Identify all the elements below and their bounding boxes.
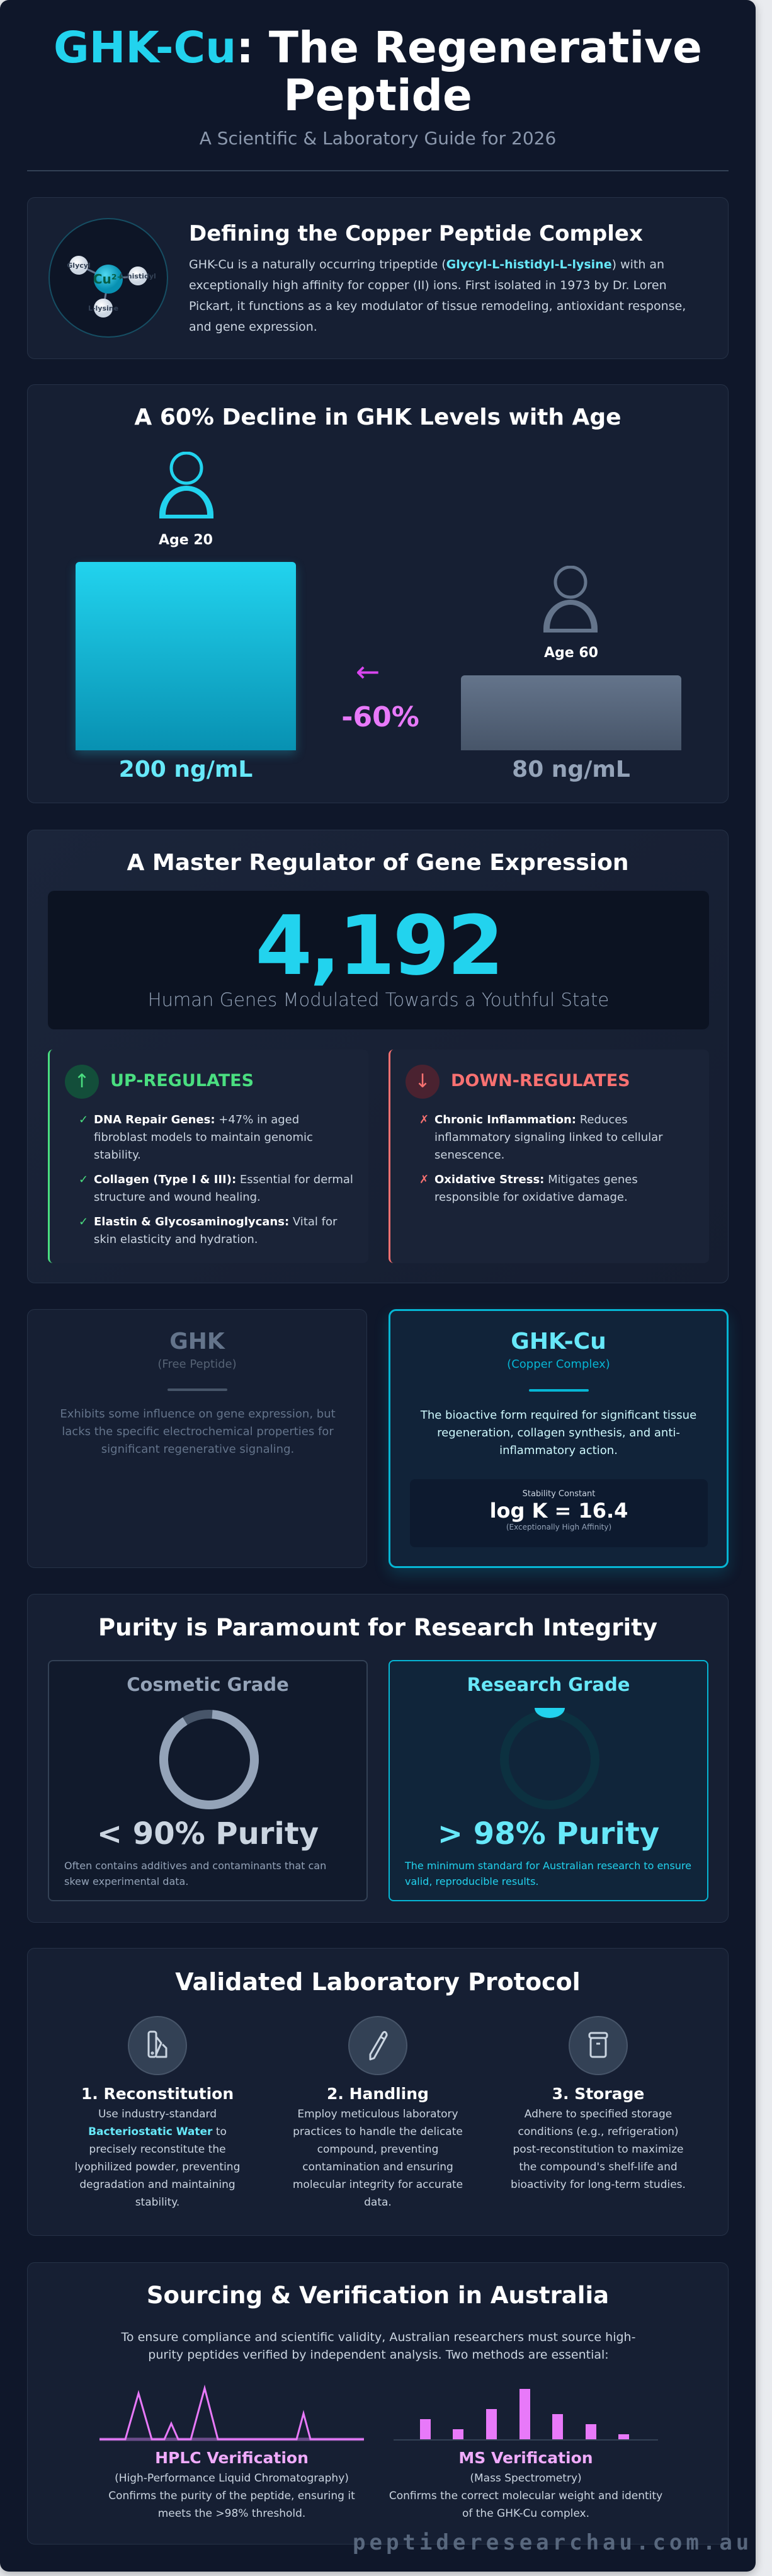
panel: down-regulates: DOWN-REGULATES bbox=[451, 1071, 630, 1091]
card: GHK free peptide: (Free Peptide) bbox=[157, 1358, 237, 1371]
icon: molecule: L-lysine bbox=[88, 304, 118, 312]
list: up-regulated genes bbox=[79, 1113, 353, 1246]
panel: master regulator bbox=[27, 830, 729, 1283]
HPLC label: HPLC Verification bbox=[155, 2449, 309, 2467]
HPLC label bbox=[108, 2449, 355, 2520]
card: research grade bbox=[389, 1660, 708, 1901]
panel: purity bbox=[27, 1594, 729, 1923]
card: cosmetic grade bbox=[48, 1660, 368, 1901]
heading: Purity is Paramount for Research Integrity bbox=[98, 1614, 657, 1641]
list: down-regulated: Chronic Inflammation: Reduces inflammatory signaling linked to cellular senescence. bbox=[434, 1113, 663, 1162]
card: GHK-Cu copper complex: (Copper Complex) bbox=[507, 1358, 610, 1371]
panel: up-regulates: UP-REGULATES bbox=[110, 1071, 254, 1091]
panel: defining the copper peptide complex bbox=[27, 197, 729, 359]
stat box: 4,192: Human Genes Modulated Towards a Youthful State bbox=[148, 989, 609, 1010]
heading: Validated Laboratory Protocol bbox=[175, 1968, 581, 1996]
MS label bbox=[389, 2449, 662, 2520]
stability constant box: Stability Constant bbox=[523, 1489, 595, 1499]
card: research grade: > 98% Purity bbox=[438, 1816, 659, 1852]
panel: 60% decline bbox=[27, 384, 729, 803]
subtitle: A Scientific & Laboratory Guide for 2026 bbox=[200, 128, 556, 149]
icon: down arrow bbox=[406, 1065, 440, 1099]
step 3: storage: Adhere to specified storage conditions (e.g., refrigeration) post-reconstitution to maximize the compound's shelf-life and bioactivity for long-term studies. bbox=[511, 2108, 686, 2191]
step 1: reconstitution: 1. Reconstitution bbox=[81, 2085, 234, 2103]
HPLC label: (High-Performance Liquid Chromatography) bbox=[115, 2472, 349, 2485]
heading: Defining the Copper Peptide Complex bbox=[189, 221, 643, 246]
heading: A 60% Decline in GHK Levels with Age bbox=[134, 404, 622, 430]
list: down-regulated: ✗ bbox=[419, 1173, 429, 1186]
HPLC label: Confirms the purity of the peptide, ensuring it meets the >98% threshold. bbox=[108, 2490, 355, 2520]
step 3: storage: 3. Storage bbox=[552, 2085, 644, 2103]
list: up-regulated genes: Collagen (Type I & III): Essential for dermal structure and wound healing. bbox=[94, 1173, 353, 1204]
panel: down-regulates bbox=[389, 1050, 709, 1263]
list: down-regulated: Oxidative Stress: Mitigates genes responsible for oxidative damage. bbox=[434, 1173, 638, 1204]
chart: MS bars bbox=[394, 2389, 658, 2441]
chart: HPLC bbox=[99, 2384, 364, 2441]
value: 80 ng/mL: 80 ng/mL bbox=[512, 757, 630, 782]
title bbox=[54, 23, 702, 121]
list: down-regulated bbox=[419, 1113, 663, 1204]
title: GHK-Cu: The Regenerative bbox=[54, 23, 702, 73]
bar: age 20 bbox=[76, 562, 296, 750]
stat box: 4,192 bbox=[48, 891, 709, 1029]
panel: up-regulates bbox=[48, 1050, 368, 1263]
-60%: -60% bbox=[341, 701, 419, 733]
list: up-regulated genes: DNA Repair Genes: +47% in aged fibroblast models to maintain genomic stability. bbox=[94, 1113, 313, 1162]
card: cosmetic grade: < 90% Purity bbox=[97, 1816, 319, 1852]
card: cosmetic grade: Often contains additives and contaminants that can skew experimental data. bbox=[64, 1860, 326, 1887]
icon: person age 60 bbox=[543, 566, 598, 633]
card: GHK-Cu copper complex: The bioactive form required for significant tissue regeneration, collagen synthesis, and anti-inflammatory action. bbox=[421, 1409, 696, 1457]
step 2: handling bbox=[293, 2016, 463, 2209]
list: up-regulated genes: Elastin & Glycosaminoglycans: Vital for skin elasticity and hydration. bbox=[94, 1215, 337, 1246]
icon: up arrow: ↑ bbox=[74, 1070, 90, 1092]
panel: protocol bbox=[27, 1948, 729, 2236]
icon: swatch bbox=[128, 2016, 187, 2075]
title: Peptide bbox=[283, 71, 472, 121]
label: age 20: Age 20 bbox=[159, 532, 213, 548]
icon: molecule: L-histidyl bbox=[120, 272, 156, 280]
list: up-regulated genes: ✓ bbox=[79, 1215, 88, 1228]
step 3: storage bbox=[511, 2016, 686, 2191]
icon: pencil bbox=[348, 2016, 407, 2075]
list: up-regulated genes: ✓ bbox=[79, 1173, 88, 1186]
icon: person age 20 bbox=[159, 452, 213, 518]
stability constant box: log K = 16.4 bbox=[490, 1499, 628, 1523]
ring chart: 90% bbox=[159, 1710, 259, 1809]
watermark: peptideresearchau.com.au bbox=[353, 2530, 752, 2555]
icon: molecule: Cu²⁺ bbox=[93, 272, 123, 287]
stability constant box: (Exceptionally High Affinity) bbox=[506, 1523, 611, 1531]
stability constant box bbox=[410, 1479, 708, 1547]
icon: down arrow: ↓ bbox=[414, 1070, 431, 1092]
card: GHK-Cu copper complex bbox=[389, 1309, 729, 1568]
step 1: reconstitution: Use industry-standard Bacteriostatic Water to precisely reconstitute the lyophilized powder, preventing degradation and maintaining stability. bbox=[75, 2108, 240, 2209]
label: age 60: Age 60 bbox=[544, 645, 598, 661]
stat box: 4,192: 4,192 bbox=[255, 898, 502, 993]
step 2: handling: 2. Handling bbox=[327, 2085, 429, 2103]
icon: molecule bbox=[48, 218, 168, 338]
MS label: Confirms the correct molecular weight and identity of the GHK-Cu complex. bbox=[389, 2490, 662, 2520]
MS label: MS Verification bbox=[458, 2449, 593, 2467]
card: GHK free peptide bbox=[27, 1309, 367, 1568]
intro text: To ensure compliance and scientific validity, Australian researchers must source high-​purity peptides verified by independent analysis. Two methods are essential: bbox=[122, 2330, 635, 2362]
card: GHK free peptide: Exhibits some influence on gene expression, but lacks the specific electrochemical properties for significant regenerative signaling. bbox=[60, 1407, 336, 1456]
icon: up arrow bbox=[65, 1065, 99, 1099]
card: GHK free peptide: GHK bbox=[169, 1329, 225, 1354]
card: research grade: Research Grade bbox=[467, 1674, 630, 1695]
value: 200 ng/mL: 200 ng/mL bbox=[119, 757, 253, 782]
card: research grade: The minimum standard for Australian research to ensure valid, reproducible results. bbox=[405, 1860, 691, 1887]
icon: archive box bbox=[569, 2016, 628, 2075]
arrow: ← bbox=[356, 655, 380, 689]
card: GHK-Cu copper complex: GHK-Cu bbox=[511, 1329, 606, 1354]
list: up-regulated genes: ✓ bbox=[79, 1113, 88, 1126]
step 2: handling: Employ meticulous laboratory practices to handle the delicate compound, preventing contamination and ensuring molecular integrity for accurate data. bbox=[293, 2108, 463, 2209]
bar: age 60 bbox=[461, 675, 681, 750]
list: down-regulated: ✗ bbox=[419, 1113, 429, 1126]
MS label: (Mass Spectrometry) bbox=[470, 2472, 582, 2485]
body text: GHK-Cu is a naturally occurring tripeptide (Glycyl-L-histidyl-L-lysine) with an exceptionally high affinity for copper (II) ions. First isolated in 1973 by Dr. Loren Pickart, it functions as a key modulator of tissue remodeling, antioxidant response, and gene expression. bbox=[189, 258, 686, 334]
icon: molecule: Glycyl bbox=[67, 261, 91, 270]
card: cosmetic grade: Cosmetic Grade bbox=[127, 1674, 289, 1695]
panel: sourcing & verification bbox=[27, 2262, 729, 2545]
heading: A Master Regulator of Gene Expression bbox=[127, 850, 629, 876]
ring chart: 98% bbox=[500, 1708, 599, 1809]
heading: Sourcing & Verification in Australia bbox=[147, 2282, 609, 2309]
step 1: reconstitution bbox=[75, 2016, 240, 2209]
